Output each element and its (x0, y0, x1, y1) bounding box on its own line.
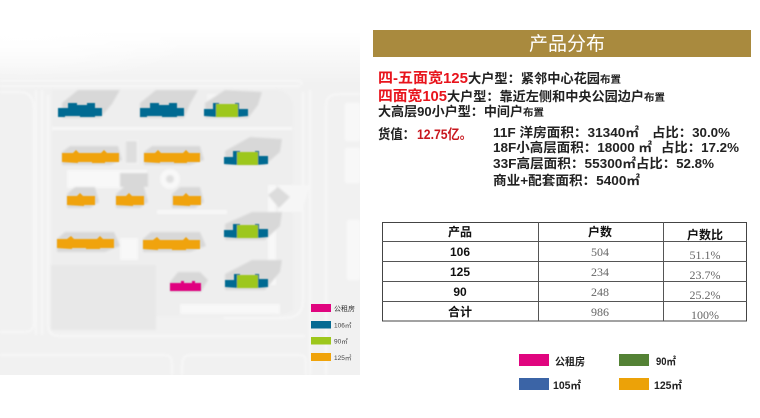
text block: product placement: 布置 (523, 106, 544, 119)
map legend: 90㎡ (334, 336, 348, 346)
road lines (0, 81, 360, 375)
value callout (378, 126, 472, 142)
building: 125 orange row two left (67, 193, 95, 206)
park area (53, 316, 154, 328)
building: mixed block row three (224, 224, 268, 238)
text block: area breakdown (493, 125, 739, 188)
bottom legend: 125㎡ (654, 379, 682, 392)
text block: product placement: 四面宽105 (378, 87, 447, 105)
entrance plaza (290, 199, 291, 200)
building: 125 orange row one right (144, 150, 200, 163)
building: mixed block top right (204, 103, 248, 117)
text block: area breakdown: 商业+配套面积：5400㎡ (493, 173, 640, 188)
table: unit distribution: 23.7% (690, 268, 720, 282)
title bar: 产品分布 (529, 33, 605, 55)
table: unit distribution: 234 (591, 265, 609, 279)
value callout: 货值： (378, 126, 415, 142)
building: 106 block top left (58, 103, 102, 117)
text block: area breakdown: 11F 洋房面积：31340㎡ (493, 125, 639, 140)
table: unit distribution (382, 222, 747, 322)
value callout: 12.75亿。 (417, 127, 472, 142)
building: 125 orange row three left (57, 236, 114, 249)
table: unit distribution: 106 (450, 245, 470, 259)
text block: product placement: 布置 (644, 91, 665, 104)
site plan map (0, 32, 360, 375)
table: unit distribution: 合计 (448, 304, 472, 319)
building: 106 block top middle (140, 103, 184, 117)
table: unit distribution: 100% (691, 308, 719, 322)
title bar (373, 30, 751, 57)
central garden paths (68, 170, 278, 313)
building: 125 orange row two middle (116, 193, 144, 206)
building: 125 orange row two right (173, 193, 201, 206)
map legend: 公租房 (334, 304, 355, 313)
map legend: 106㎡ (334, 320, 352, 330)
table: unit distribution: 产品 (448, 224, 472, 239)
bottom legend: 公租房 (555, 355, 585, 368)
text block: area breakdown: 33F高层面积：55300㎡ (493, 156, 636, 171)
table: unit distribution: 986 (591, 305, 609, 319)
text block: product placement: 大高层90小户型：中间户 (378, 103, 523, 119)
building shadows (57, 90, 282, 292)
text block: product placement: 布置 (600, 73, 621, 86)
text block: area breakdown: 占比：52.8% (636, 156, 714, 171)
map legend: 125㎡ (334, 353, 352, 362)
table: unit distribution: 125 (450, 265, 470, 279)
table: unit distribution: 户数比 (687, 227, 723, 242)
bottom legend (519, 354, 682, 392)
building: mixed block row four (225, 274, 268, 288)
map legend (311, 304, 355, 362)
text block: product placement (378, 69, 665, 119)
table: unit distribution: 户数 (588, 224, 612, 239)
building: mixed block row two (224, 151, 268, 165)
table: unit distribution: 51.1% (690, 248, 720, 262)
text block: area breakdown: 占比：17.2% (661, 140, 739, 155)
text block: area breakdown: 占比：30.0% (652, 125, 730, 140)
text block: product placement: 四-五面宽125 (378, 69, 468, 87)
text block: area breakdown: 18F小高层面积：18000 ㎡ (493, 140, 652, 155)
residential site block (52, 90, 293, 316)
text block: product placement: 大户型：紧邻中心花园 (468, 70, 600, 86)
bottom legend: 105㎡ (553, 379, 581, 392)
table: unit distribution: 504 (591, 245, 609, 259)
building: 125 orange row three right (143, 237, 200, 250)
building: public rental pink (170, 281, 201, 291)
text block: product placement: 大户型：靠近左侧和中央公园边户 (447, 88, 644, 104)
building: 125 orange row one left (62, 150, 119, 163)
bottom legend: 90㎡ (656, 355, 676, 368)
table: unit distribution: 25.2% (690, 288, 720, 302)
buildings (57, 103, 268, 291)
table: unit distribution: 90 (453, 285, 467, 299)
table: unit distribution: 248 (591, 285, 609, 299)
